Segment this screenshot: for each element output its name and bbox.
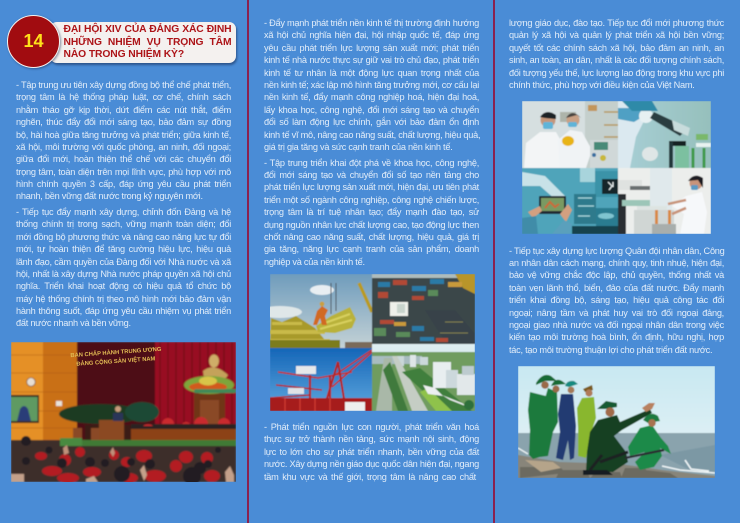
text block: column 3 paragraph 1: đối tượng yếu thế, lực lượng lao động trong khu vực phi — [509, 68, 724, 78]
text block: column 1 paragraph 1: xã hội, môi trường với quốc phòng, an ninh, đối ngoại; — [16, 142, 231, 152]
text block: column 3 paragraph 2: - Tiếp tục xây dựng lực lượng Quân đội nhân dân, Công — [509, 246, 725, 256]
text block: column 3 paragraph 1 — [509, 18, 724, 90]
text block: column 2 paragraph 3 — [264, 422, 480, 482]
text block: column 3 paragraph 1: quyết tốt các chính sách xã hội, bảo đảm an ninh, an — [509, 43, 724, 53]
text block: column 2 paragraph 3: lực to lớn cho sự phát triển nhanh, bền vững của đất — [264, 447, 479, 457]
text block: column 2 paragraph 1: xã hội chủ nghĩa hiện đại, hội nhập quốc tế, đáp ứng — [264, 30, 479, 40]
text block: column 2 paragraph 2: phát triển lực lượng sản xuất mới, hiện đại, ưu tiên phát — [264, 182, 479, 192]
title plate — [50, 22, 236, 62]
photo collage: science and technology — [522, 101, 711, 234]
text block: column 3 paragraph 2: ngoại giao nhà nước và đối ngoại nhân dân trong việc — [509, 320, 724, 330]
text block: column 3 paragraph 2: tác, tạo môi trường thuận lợi cho phát triển đất nước. — [509, 345, 712, 355]
text block: column 2 paragraph 2: gia tăng, năng lực cạnh tranh của sản phẩm, doanh — [264, 244, 479, 254]
text block: column 1 paragraph 1: nghẽn, thúc đẩy đổi mới sáng tạo, bảo đảm sự đồng — [16, 117, 231, 127]
column divider 2 — [493, 0, 495, 523]
number badge: 14 — [23, 31, 44, 51]
text block: column 2 paragraph 2: triển một số ngành công nghiệp, công nghệ chiến lược, — [264, 195, 479, 205]
text block: column 3 paragraph 1: lượng giáo dục, đào tạo. Tiếp tục đổi mới phương thức — [509, 18, 724, 28]
text block: column 1 paragraph 1: hình chính quyền 3 cấp, đáp ứng yêu cầu phát triển — [16, 179, 231, 189]
text block: column 1 paragraph 1: - Tập trung ưu tiên xây dựng đồng bộ thể chế phát triển, — [16, 80, 231, 90]
text block: column 1 paragraph 1 — [16, 80, 231, 201]
kneeling officer — [586, 409, 652, 472]
standing soldiers — [528, 388, 558, 459]
text block: column 1 paragraph 2: lãnh đạo, cầm quyền của Đảng đối với Nhà nước và xã — [16, 256, 231, 266]
heading — [64, 22, 232, 60]
text block: column 2 paragraph 3: - Phát triển nguồn lực con người, phát triển văn hoá — [264, 422, 479, 432]
number badge — [7, 15, 60, 68]
text block: column 2 paragraph 2: trọng tâm là trí tuệ nhân tạo; đẩy mạnh đào tạo, sử — [264, 207, 479, 217]
text block: column 2 paragraph 1: kinh tế vĩ mô, nâng cao năng suất, chất lượng, hiệu quả, — [264, 130, 480, 140]
text block: column 1 paragraph 2: nghĩa. Triển khai hoạt động có hiệu quả tổ chức bộ — [16, 281, 231, 291]
text block: column 2 paragraph 3: tầm khu vực và thế giới, trọng tâm là nâng cao chất — [264, 472, 476, 482]
text block: column 1 paragraph 1: nhằm tháo gỡ kịp thời, dứt điểm các nút thắt, điểm — [16, 105, 231, 115]
text block: column 1 paragraph 2: mới, tự hoàn thiện để tăng cường hiệu lực, hiệu quả — [16, 244, 231, 254]
text block: column 2 paragraph 1: - Đẩy mạnh phát triển nền kinh tế thị trường định hướng — [264, 18, 479, 28]
crouching soldier — [628, 425, 671, 470]
text block: column 3 paragraph 2: triển khai đồng bộ, sáng tạo, hiệu quả công tác đối — [509, 295, 724, 305]
text block: column 1 paragraph 1: bộ, hài hoà giữa tăng trưởng và phát triển; giữa kinh tế, — [16, 130, 231, 140]
text block: column 2 paragraph 3: thực sự trở thành nền tảng, sức mạnh nội sinh, động — [264, 434, 479, 444]
text block: column 2 paragraph 1: nền kinh tế; xác lập mô hình tăng trưởng mới, cơ cấu lại — [264, 80, 479, 90]
text block: column 1 paragraph 2 — [16, 207, 232, 328]
text block: column 1 paragraph 2: đất nước nhanh và bền vững. — [16, 318, 131, 328]
photo collage: economy — [270, 274, 475, 411]
text block: column 2 paragraph 1: yêu cầu phát triển lực lượng sản xuất mới; phát triển — [264, 43, 479, 53]
text block: column 1 paragraph 1: nhanh, bền vững đất nước trong kỷ nguyên mới. — [16, 191, 203, 201]
text block: column 2 paragraph 2: dụng nguồn nhân lực chất lượng cao, tạo động lực then — [264, 220, 479, 230]
text block: column 1 paragraph 2: - Tiếp tục đẩy mạnh xây dựng, chỉnh đốn Đảng và hệ — [16, 207, 231, 217]
text block: column 3 paragraph 2: ngoại; nâng tầm và phát huy vai trò đối ngoại đảng, — [509, 308, 724, 318]
text block: column 3 paragraph 2: kiến tạo môi trường hoà bình, ổn định, hữu nghị, hợp — [509, 332, 724, 342]
photo: soldiers on the coast — [518, 366, 715, 478]
text block: column 1 paragraph 1: trọng tâm là hệ thống pháp luật, cơ chế, chính sách — [16, 92, 231, 102]
text block: column 1 paragraph 2: thống chính trị trong sạch, vững mạnh toàn diện; đổi — [16, 219, 231, 229]
heading: NÀO TRONG NHIỆM KỲ? — [64, 49, 184, 60]
photo: party central committee conference: BAN CHẤP HÀNH TRUNG ƯƠNG — [70, 346, 162, 359]
text block: column 2 paragraph 2: đổi mới sáng tạo và chuyển đổi số tạo nền tảng cho — [264, 170, 479, 180]
text block: column 1 paragraph 1: giữa đổi mới, hoàn thiện thể chế với các chuyển đổi — [16, 154, 231, 164]
heading: ĐẠI HỘI XIV CỦA ĐẢNG XÁC ĐỊNH — [64, 24, 232, 34]
text block: column 2 paragraph 1: đổi số làm động lực chính, gắn với bảo đảm ổn định — [264, 117, 479, 127]
photo: party central committee conference — [11, 342, 236, 482]
title banner — [6, 14, 238, 70]
text block: column 1 paragraph 1: trọng tâm, toàn diện trên mọi lĩnh vực, phù hợp với mô — [16, 167, 231, 177]
text block: column 2 paragraph 2: nghiệp và của nền kinh tế. — [264, 257, 365, 267]
text block: column 3 paragraph 2: bảo vệ vững chắc độc lập, chủ quyền, thống nhất và — [509, 270, 724, 280]
heading: NHỮNG NHIỆM VỤ TRỌNG TÂM — [64, 36, 232, 48]
text block: column 2 paragraph 2: - Tập trung triển khai đột phá về khoa học, công nghệ, — [264, 158, 479, 168]
text block: column 3 paragraph 2 — [509, 246, 725, 355]
text block: column 1 paragraph 2: hội, nhất là xây dựng Nhà nước pháp quyền xã hội chủ — [16, 269, 231, 279]
text block: column 3 paragraph 2: an nhân dân cách mạng, chính quy, tinh nhuệ, hiện đại, — [509, 258, 724, 268]
text block: column 1 paragraph 2: mới đồng bộ phương thức và nâng cao năng lực tự đổi — [16, 232, 231, 242]
photo: party central committee conference: ĐẢNG CỘNG SẢN VIỆT NAM — [76, 354, 156, 368]
column divider 1 — [247, 0, 249, 523]
text block: column 2 paragraph 3: nước. Xây dựng nền giáo dục quốc dân hiện đại, ngang — [264, 459, 479, 469]
text block: column 3 paragraph 1: chính thức, phù hợp với điều kiện của Việt Nam. — [509, 80, 695, 90]
text block: column 3 paragraph 2: toàn vẹn lãnh thổ, biển, đảo của đất nước. Đẩy mạnh — [509, 283, 724, 293]
text block: column 1 paragraph 2: hành thông suốt, đáp ứng yêu cầu nhiệm vụ phát triển — [16, 306, 231, 316]
text block: column 2 paragraph 1 — [264, 18, 480, 152]
text block: column 3 paragraph 1: quản lý xã hội và quản lý phát triển xã hội bền vững; — [509, 30, 724, 40]
text block: column 2 paragraph 1: giá trị gia tăng và sức cạnh tranh của nền kinh tế. — [264, 142, 453, 152]
text block: column 1 paragraph 2: máy hệ thống chính trị theo mô hình mới bảo đảm vận — [16, 294, 231, 304]
text block: column 3 paragraph 1: sinh, an toàn, an dân, nhất là các đối tượng chính sách, — [509, 55, 724, 65]
text block: column 2 paragraph 1: lấy khoa học, công nghệ, đổi mới sáng tạo và chuyển — [264, 105, 479, 115]
text block: column 2 paragraph 2: chốt nâng cao năng suất, chất lượng, hiệu quả, giá trị — [264, 232, 479, 242]
text block: column 2 paragraph 1: nền kinh tế, đẩy mạnh công nghiệp hoá, hiện đại hoá, — [264, 92, 479, 102]
text block: column 2 paragraph 1: kinh tế nhà nước thực sự giữ vai trò chủ đạo, phát triển — [264, 55, 479, 65]
text block: column 2 paragraph 2 — [264, 158, 480, 267]
text block: column 2 paragraph 1: kinh tế tư nhân là một động lực quan trọng nhất của — [264, 68, 479, 78]
